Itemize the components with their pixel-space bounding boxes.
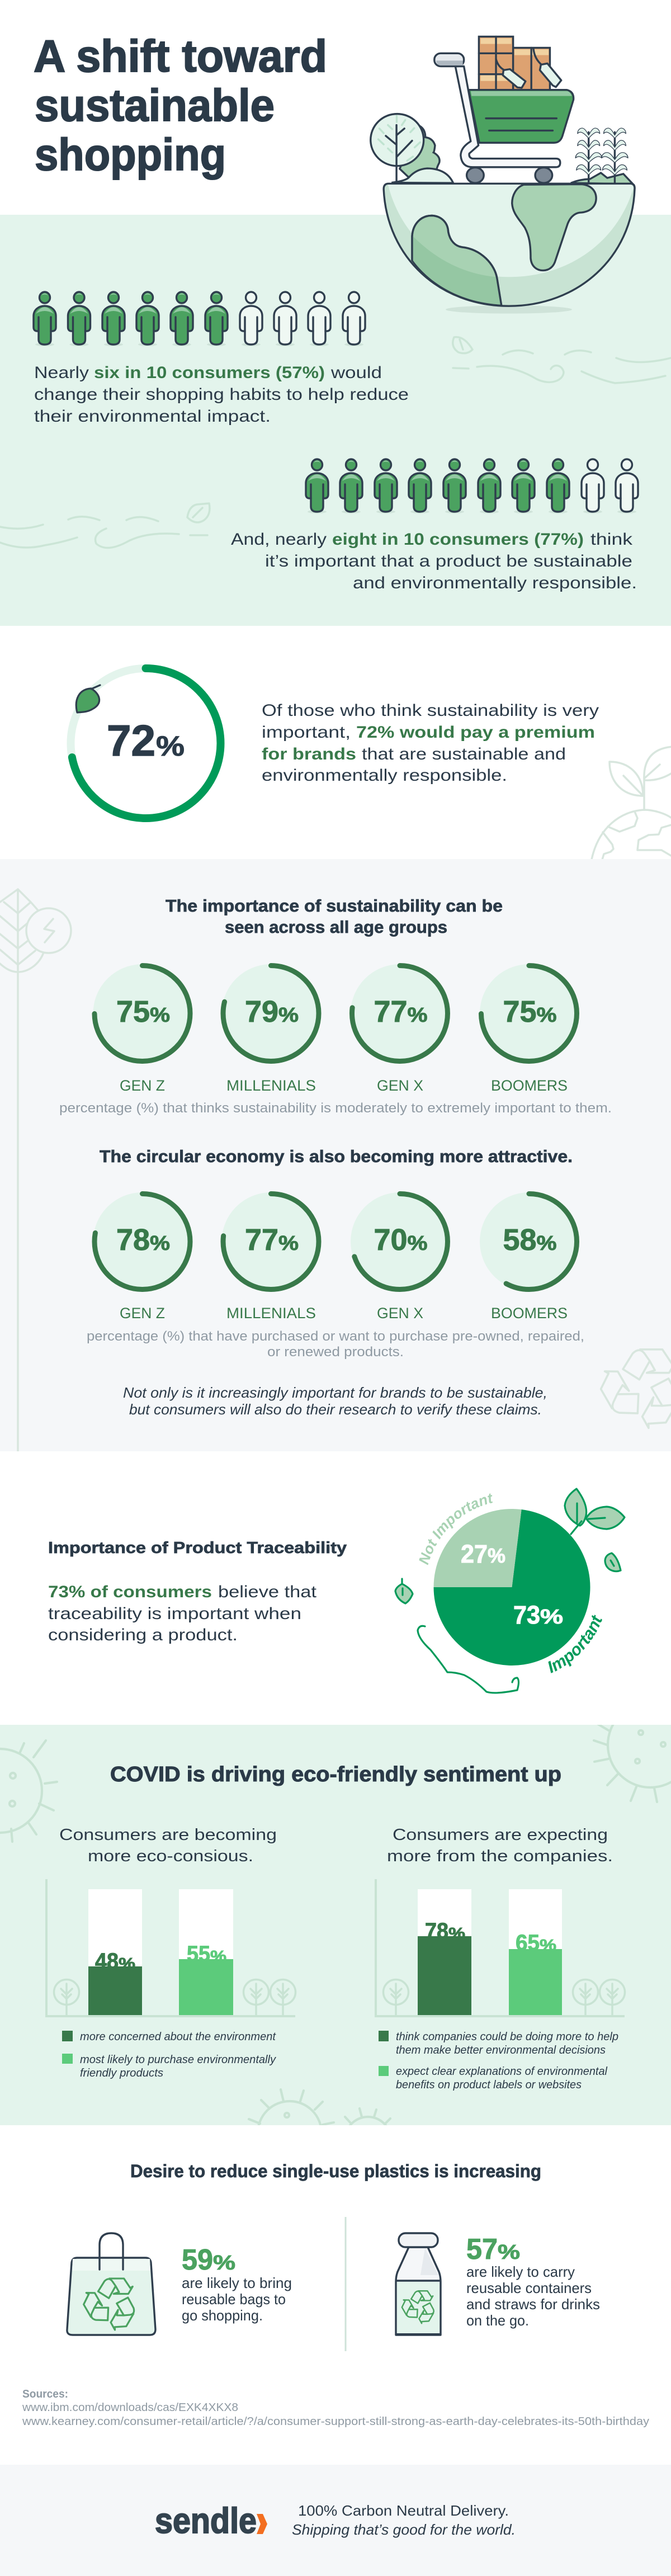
statistic: 57% reusable containers: on the go.: [466, 2312, 529, 2329]
caption: circular economy percentages: [87, 1329, 584, 1360]
statistic: 59% reusable bags: 59: [182, 2244, 213, 2276]
decorative waves and leaf: left: [0, 503, 210, 548]
pie chart: traceability: Not Important: [419, 1493, 493, 1565]
footer tagline: [292, 2502, 516, 2538]
icon: reusable bag: [67, 2233, 155, 2335]
decorative waves and leaf: top right: [453, 337, 671, 383]
bar chart: eco-conscious: 48: [95, 1949, 119, 1974]
divider between statistics: [344, 2217, 347, 2351]
title: A shift toward: [34, 31, 327, 82]
legend: expecting more: benefits on product labels or websites: [396, 2079, 582, 2091]
icon: reusable bottle: [396, 2233, 441, 2335]
donut: Millenials 79%: 79: [245, 995, 278, 1028]
donut: Millenials 79%: %: [278, 1003, 299, 1026]
bush behind tree: [400, 125, 440, 177]
donut: Gen X 70%: GEN X: [377, 1305, 423, 1322]
cart frame: [455, 67, 560, 167]
legend: expecting more: them make better environmental decisions: [396, 2044, 606, 2056]
statistic: 59% reusable bags: [182, 2244, 292, 2324]
donut chart: 72%: %: [156, 730, 185, 762]
text: six in 10 consumers: change their shopping habits to help reduce: [34, 385, 409, 404]
subheading: eco-conscious: [59, 1826, 277, 1865]
pie chart: traceability: %: [540, 1605, 563, 1628]
text: six in 10 consumers: their environmental impact.: [34, 407, 271, 426]
statistic: 57% reusable containers: %: [498, 2240, 520, 2263]
italic note: research claims: but consumers will also do their research to verify these claims.: [129, 1401, 542, 1418]
donut: Boomers 58%: [480, 1192, 578, 1322]
continents: [412, 184, 596, 305]
text: 72% would pay a premium: Of those who think sustainability is very: [262, 701, 599, 720]
icons: leaves around pie: [395, 1489, 625, 1693]
subheading: expecting more: more from the companies.: [387, 1847, 613, 1865]
text: 72% would pay a premium: important,: [262, 723, 351, 742]
text: 73% of consumers: traceability is important when: [48, 1605, 301, 1623]
sources: [22, 2388, 649, 2428]
statistic: 57% reusable containers: are likely to carry: [466, 2263, 575, 2280]
pie chart: traceability: 73: [513, 1601, 540, 1629]
legend: eco-conscious: more concerned about the environment: [80, 2031, 276, 2043]
subheading: expecting more: Consumers are expecting: [393, 1826, 608, 1844]
donut: Gen Z 75%: 75: [116, 995, 150, 1028]
text: six in 10 consumers: [34, 364, 409, 426]
legend: eco-conscious: friendly products: [80, 2067, 163, 2079]
bar chart: eco-conscious: %: [210, 1947, 226, 1965]
donut: Gen Z 75%: [93, 964, 191, 1094]
donut: Boomers 75%: %: [537, 1003, 557, 1026]
donut: Gen X 77%: [351, 964, 449, 1094]
donut: Millenials 77%: MILLENIALS: [226, 1305, 316, 1322]
statistic: 59% reusable bags: reusable bags to: [182, 2291, 286, 2308]
text: 72% would pay a premium: for brands: [262, 745, 356, 763]
text: 72% would pay a premium: [262, 701, 599, 785]
title: [34, 31, 327, 180]
title: shopping: [35, 130, 226, 180]
subheading: eco-conscious: more eco-consious.: [88, 1847, 253, 1865]
heading: product traceability: Importance of Product Traceability: [48, 1539, 347, 1557]
legend: eco-conscious: [62, 2031, 276, 2079]
heading: importance across age groups: seen across all age groups: [225, 917, 447, 937]
bar chart: expecting more: 78: [425, 1919, 448, 1943]
footer tagline: Shipping that’s good for the world.: [292, 2521, 516, 2538]
footer tagline: 100% Carbon Neutral Delivery.: [298, 2502, 509, 2519]
section background: age groups: [0, 859, 671, 1451]
decorative viruses: [0, 1725, 671, 2125]
legend: expecting more: expect clear explanations of environmental: [396, 2065, 608, 2078]
bar chart: eco-conscious: 55: [187, 1942, 210, 1966]
half globe: [384, 183, 635, 306]
donut: Millenials 77%: [221, 1192, 320, 1322]
cart handle: [434, 53, 464, 67]
people row: 6 of 10: [34, 292, 365, 346]
pie chart: traceability: Important: [548, 1615, 602, 1673]
bar chart: expecting more: %: [540, 1936, 556, 1954]
icon: leaf on donut: [76, 685, 100, 713]
cart wheels: [467, 168, 552, 183]
donut: Gen X 70%: [351, 1192, 449, 1322]
globe outline: [384, 183, 635, 306]
bar chart: eco-conscious: %: [119, 1955, 135, 1972]
donut: Millenials 79%: MILLENIALS: [226, 1077, 316, 1094]
cart basket: [469, 90, 574, 143]
bar chart: expecting more: [376, 1879, 625, 2016]
cardboard boxes: [479, 36, 561, 90]
donut: Gen X 77%: 77: [374, 995, 407, 1028]
heading: single-use plastics: Desire to reduce single-use plastics is increasing: [130, 2161, 541, 2181]
donut chart: 72%: 72: [107, 716, 155, 765]
statistic: 57% reusable containers: [466, 2233, 600, 2329]
caption: circular economy percentages: percentage (%) that have purchased or want to purchase pre-owned, repaired,: [87, 1329, 584, 1344]
donut: Millenials 77%: %: [278, 1232, 299, 1254]
bar chart: eco-conscious: [46, 1879, 295, 2016]
pie chart: traceability: %: [488, 1544, 505, 1567]
statistic: 59% reusable bags: go shopping.: [182, 2307, 263, 2324]
donut: Gen X 70%: %: [407, 1232, 427, 1254]
text: 72% would pay a premium: environmentally responsible.: [262, 766, 507, 785]
corn plants: [571, 128, 633, 184]
italic note: research claims: Not only is it increasingly important for brands to be sustainable,: [123, 1384, 547, 1401]
decorative leaf with energy icon: [0, 889, 71, 1451]
heading: importance across age groups: [166, 896, 503, 937]
people row: 8 of 10: [306, 459, 638, 513]
statistic: 57% reusable containers: 57: [466, 2233, 498, 2266]
text: 73% of consumers: believe that: [218, 1583, 317, 1601]
text: six in 10 consumers: six in 10 consumers (57%): [94, 364, 325, 382]
section background: covid: [0, 1725, 671, 2125]
donut: Boomers 75%: 75: [503, 995, 537, 1028]
section background: consumers: [0, 215, 671, 626]
donut: Boomers 75%: BOOMERS: [491, 1077, 568, 1094]
subheading: expecting more: [387, 1826, 613, 1865]
bar chart: expecting more: 65: [516, 1931, 540, 1955]
globe shadow: [446, 305, 572, 314]
text: eight in 10 consumers: And, nearly: [231, 530, 327, 549]
statistic: 57% reusable containers: reusable containers: [466, 2280, 592, 2296]
legend: expecting more: [379, 2031, 618, 2091]
caption: circular economy percentages: or renewed products.: [267, 1344, 404, 1360]
text: 73% of consumers: [48, 1583, 317, 1644]
donut: Gen Z 78%: GEN Z: [120, 1305, 165, 1322]
donut: Boomers 75%: [480, 964, 578, 1094]
text: eight in 10 consumers: [231, 530, 637, 592]
decorative recycle icon: [599, 1348, 671, 1429]
sources: Sources:: [22, 2388, 68, 2400]
text: eight in 10 consumers: it’s important that a product be sustainable: [265, 552, 632, 570]
donut: Boomers 58%: BOOMERS: [491, 1305, 568, 1322]
caption: importance percentages: percentage (%) that thinks sustainability is moderately to extremely important to them.: [59, 1101, 612, 1116]
heading: importance across age groups: The importance of sustainability can be: [166, 896, 503, 916]
illustration: globe with shopping cart: [371, 36, 635, 314]
donut: Boomers 58%: %: [537, 1232, 557, 1254]
donut: Gen Z 78%: 78: [116, 1223, 150, 1257]
legend: eco-conscious: most likely to purchase environmentally: [80, 2054, 276, 2066]
donut: Millenials 79%: [221, 964, 320, 1094]
donut chart: 72%: [70, 668, 220, 818]
text: eight in 10 consumers: think: [590, 530, 633, 549]
front bush: [391, 168, 453, 183]
bar chart: expecting more: %: [448, 1924, 465, 1942]
title: sustainable: [35, 81, 275, 131]
text: eight in 10 consumers: and environmentally responsible.: [353, 574, 637, 592]
heading: covid sentiment: COVID is driving eco-friendly sentiment up: [110, 1763, 561, 1786]
statistic: 57% reusable containers: and straws for drinks: [466, 2296, 600, 2313]
text: 72% would pay a premium: 72% would pay a premium: [356, 723, 595, 742]
footer background: [0, 2465, 671, 2576]
text: eight in 10 consumers: eight in 10 consumers (77%): [332, 530, 584, 549]
heading: circular economy: The circular economy is also becoming more attractive.: [100, 1147, 573, 1166]
tree: [371, 114, 424, 181]
globe highlight: [388, 185, 634, 277]
donut: Gen X 77%: GEN X: [377, 1077, 423, 1094]
text: 72% would pay a premium: that are sustainable and: [362, 745, 566, 763]
text: 73% of consumers: considering a product.: [48, 1626, 238, 1644]
donut: Millenials 77%: 77: [245, 1223, 278, 1257]
donut: Gen X 70%: 70: [374, 1223, 407, 1257]
subheading: eco-conscious: Consumers are becoming: [59, 1826, 277, 1844]
logo: sendle: sendle: [155, 2500, 257, 2541]
italic note: research claims: [123, 1384, 547, 1418]
donut: Gen Z 75%: GEN Z: [120, 1077, 165, 1094]
pie chart: traceability: 27: [461, 1540, 488, 1568]
pie chart: traceability: [419, 1493, 602, 1673]
legend: expecting more: think companies could be doing more to help: [396, 2031, 618, 2043]
donut: Gen Z 78%: %: [150, 1232, 170, 1254]
text: 73% of consumers: 73% of consumers: [48, 1583, 212, 1601]
decorative plant on globe: [592, 747, 671, 860]
donut: Gen X 77%: %: [407, 1003, 427, 1026]
sources: www.ibm.com/downloads/cas/EXK4XKX8: [22, 2402, 238, 2414]
donut: Gen Z 78%: [93, 1192, 191, 1322]
donut: Boomers 58%: 58: [503, 1223, 537, 1257]
sources: www.kearney.com/consumer-retail/article/?/a/consumer-support-still-strong-as-earth-day-celebrates-its-50th-birthday: [22, 2415, 649, 2428]
text: six in 10 consumers: Nearly: [34, 364, 89, 382]
text: six in 10 consumers: would: [330, 364, 382, 382]
statistic: 59% reusable bags: are likely to bring: [182, 2275, 292, 2291]
donut: Gen Z 75%: %: [150, 1003, 170, 1026]
statistic: 59% reusable bags: %: [213, 2251, 235, 2274]
